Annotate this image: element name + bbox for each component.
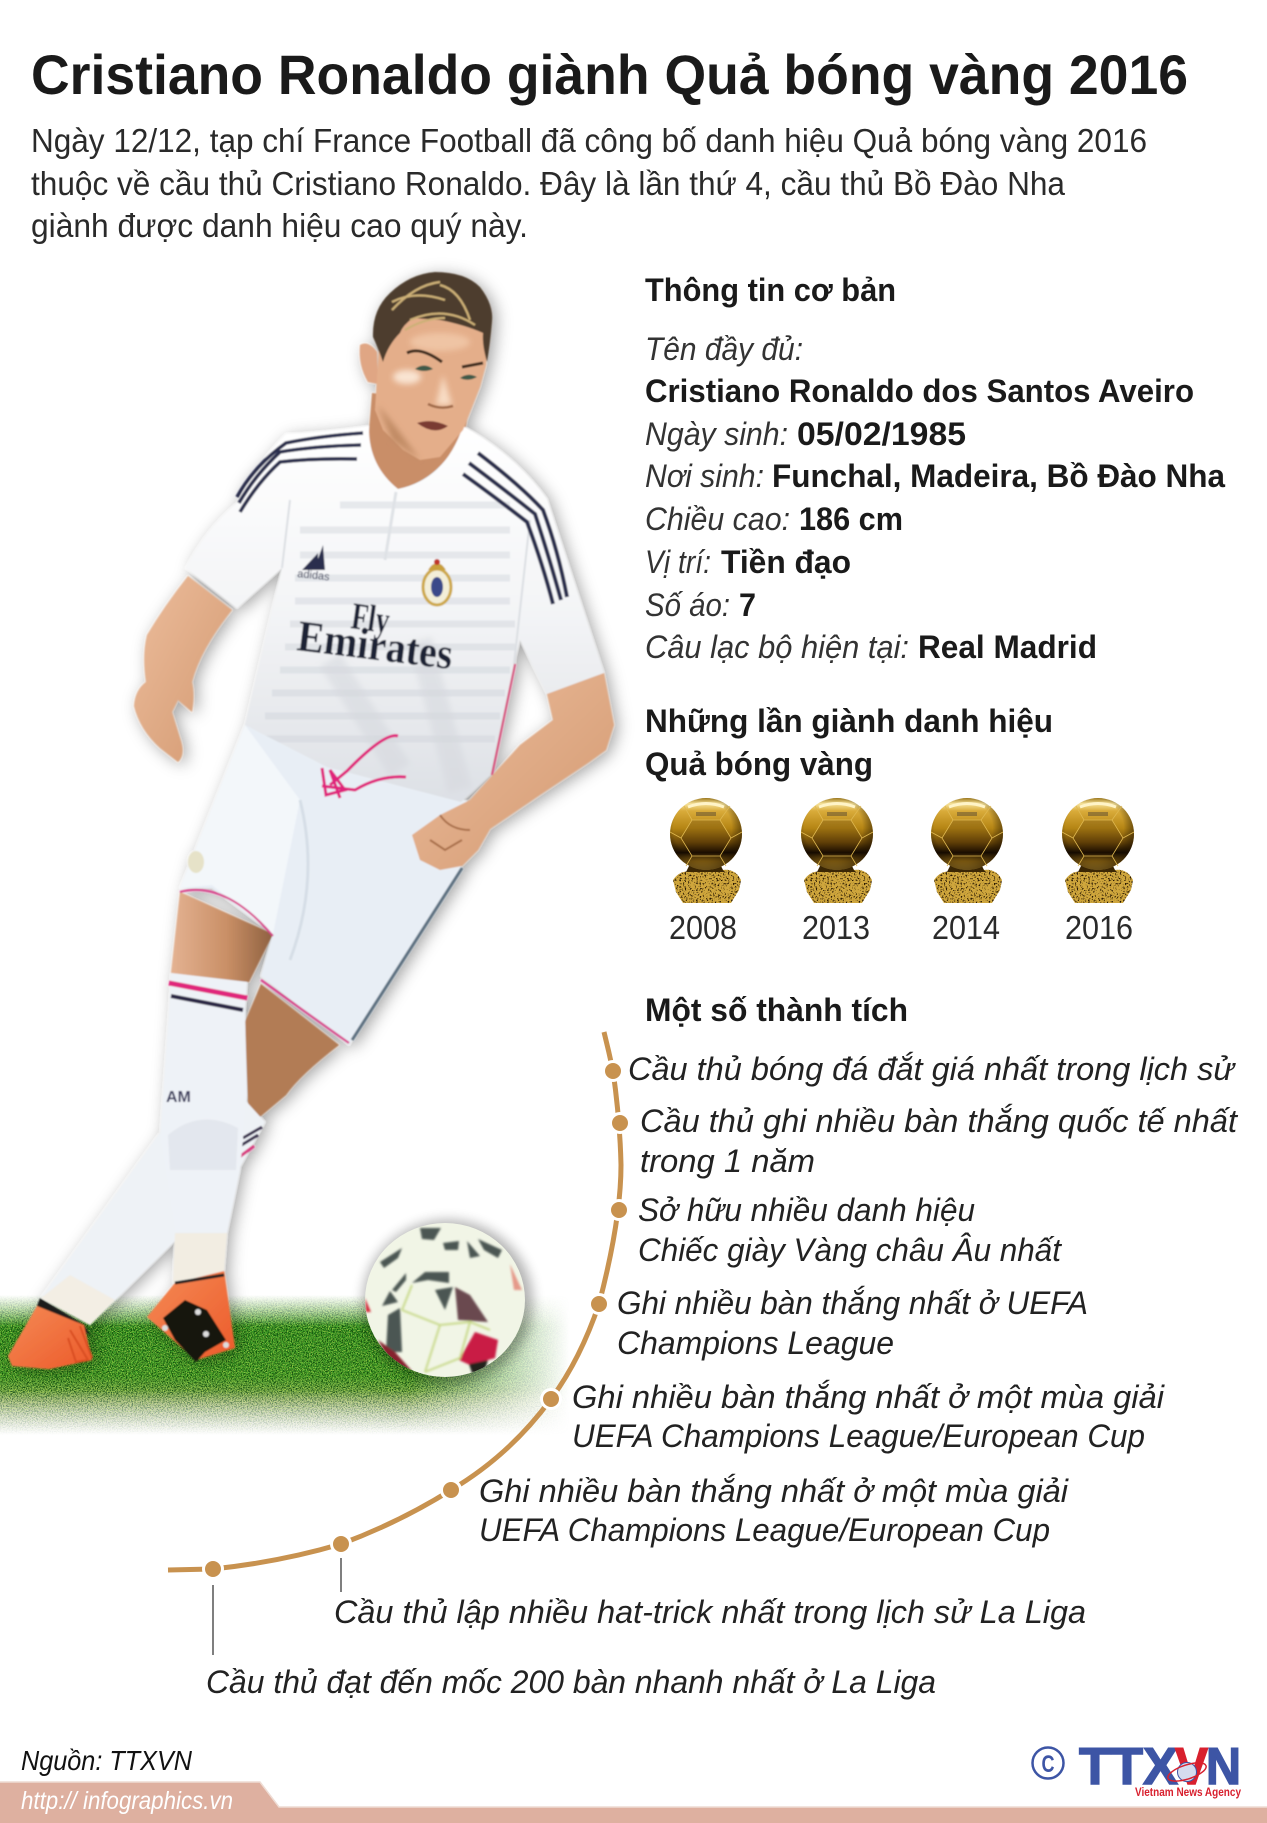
position: Tiền đạo [721,544,851,580]
logo: TTXVN: TTX [1079,1738,1178,1796]
heading: achievements: Một số thành tích [645,992,908,1028]
achievement: international goals: trong 1 năm [640,1143,815,1179]
birth date: Ngày sinh: [645,416,788,452]
full name [645,331,1194,409]
source: Nguồn: TTXVN [21,1745,193,1776]
intro paragraph: Ngày 12/12, tạp chí France Football đã công bố danh hiệu Quả bóng vàng 2016 [31,122,1147,159]
current club [645,629,1097,665]
birthplace: Nơi sinh: [645,458,764,494]
brows and eyes [407,351,483,367]
achievement: season goals 1 [572,1379,1165,1454]
full name: Tên đầy đủ: [645,331,803,367]
globe emblem [1166,1759,1208,1785]
placket [385,492,396,560]
trophy 2016 [1062,798,1134,903]
heading: golden ball wins: Quả bóng vàng [645,746,873,782]
heading: golden ball wins: Những lần giành danh hiệu [645,703,1053,739]
sponsor adidas [297,545,331,583]
year 2016: 2016 [1065,909,1133,946]
year 2014: 2014 [932,909,1000,946]
website url: http:// infographics.vn [21,1787,233,1815]
year 2008: 2008 [669,909,737,946]
footer band [0,1782,1267,1823]
achievement: 200 goals: Cầu thủ đạt đến mốc 200 bàn nhanh nhất ở La Liga [206,1664,936,1700]
head [360,272,492,460]
player photo illustration [8,272,614,1369]
back leg [8,984,339,1369]
face highlights [378,333,470,460]
soccer ball [363,1220,533,1384]
shirt number: 7 [739,587,756,623]
achievement: golden shoe: Sở hữu nhiều danh hiệu [638,1192,975,1228]
achievement: golden shoe [638,1192,1062,1268]
jersey [186,426,604,802]
achievement: UEFA goals [617,1285,1088,1361]
position: Vị trí: [645,544,711,580]
intro paragraph: giành được danh hiệu cao quý này. [31,207,528,244]
intro paragraph: thuộc về cầu thủ Cristiano Ronaldo. Đây là lần thứ 4, cầu thủ Bồ Đào Nha [31,165,1066,202]
front leg [147,892,273,1362]
copyright mark [1032,1748,1064,1778]
achievements timeline curve [168,1032,630,1655]
club crest [423,559,451,605]
height: Chiều cao: [645,501,790,537]
section: basic information [645,272,1225,665]
jersey tone bands [262,505,515,739]
trophy 2014 [931,798,1003,903]
pink lace [322,736,406,798]
sponsor Fly Emirates: Emirates [295,611,456,679]
achievement: golden shoe: Chiếc giày Vàng châu Âu nhất [638,1232,1062,1268]
achievement: season goals 1: UEFA Champions League/European Cup [572,1418,1145,1454]
shorts [180,725,470,1045]
achievement: UEFA goals: Ghi nhiều bàn thắng nhất ở UEFA [617,1285,1088,1321]
birthplace: Funchal, Madeira, Bồ Đào Nha [772,458,1225,494]
position [645,544,851,580]
section: golden ball wins [645,703,1134,946]
sponsor Fly Emirates: Fly [349,595,392,642]
intro paragraph [31,122,1147,244]
left arm [134,576,232,762]
trophy 2013 [801,798,873,903]
neck [367,393,470,489]
logo: TTXVN: N [1206,1738,1241,1796]
birth date: 05/02/1985 [797,416,966,452]
trophy 2008 [670,798,742,903]
height [645,501,903,537]
title: Cristiano Ronaldo giành Quả bóng vàng 2016 [31,43,1188,106]
achievement: international goals [640,1103,1238,1179]
hair [373,272,492,362]
birth date [645,416,966,452]
right arm and fist [412,673,614,870]
achievement: most expensive: Cầu thủ bóng đá đắt giá nhất trong lịch sử [628,1051,1237,1087]
copyright mark: C [1042,1751,1054,1778]
agency name: Vietnam News Agency [1135,1787,1242,1799]
sponsor adidas: adidas [297,568,331,583]
heading: basic info: Thông tin cơ bản [645,272,896,308]
achievement: season goals 1: Ghi nhiều bàn thắng nhất ở một mùa giải [572,1379,1165,1415]
achievement: UEFA goals: Champions League [617,1325,894,1361]
shirt number: Số áo: [645,587,730,623]
achievement: season goals 2: UEFA Champions League/European Cup [479,1512,1050,1548]
sock lettering: AM [166,1089,191,1106]
grass field [0,1295,570,1435]
achievement: hat-tricks: Cầu thủ lập nhiều hat-trick nhất trong lịch sử La Liga [334,1594,1086,1630]
current club: Real Madrid [918,629,1097,665]
achievement: season goals 2: Ghi nhiều bàn thắng nhất ở một mùa giải [479,1473,1069,1509]
logo: TTXVN: V [1175,1738,1208,1796]
current club: Câu lạc bộ hiện tại: [645,629,909,665]
logo: TTXVN [1032,1738,1242,1799]
achievement: international goals: Cầu thủ ghi nhiều bàn thắng quốc tế nhất [640,1103,1238,1139]
heading: golden ball wins [645,703,1053,782]
height: 186 cm [799,501,903,537]
achievement: season goals 2 [479,1473,1069,1548]
full name: Cristiano Ronaldo dos Santos Aveiro [645,373,1194,409]
year 2013: 2013 [802,909,870,946]
